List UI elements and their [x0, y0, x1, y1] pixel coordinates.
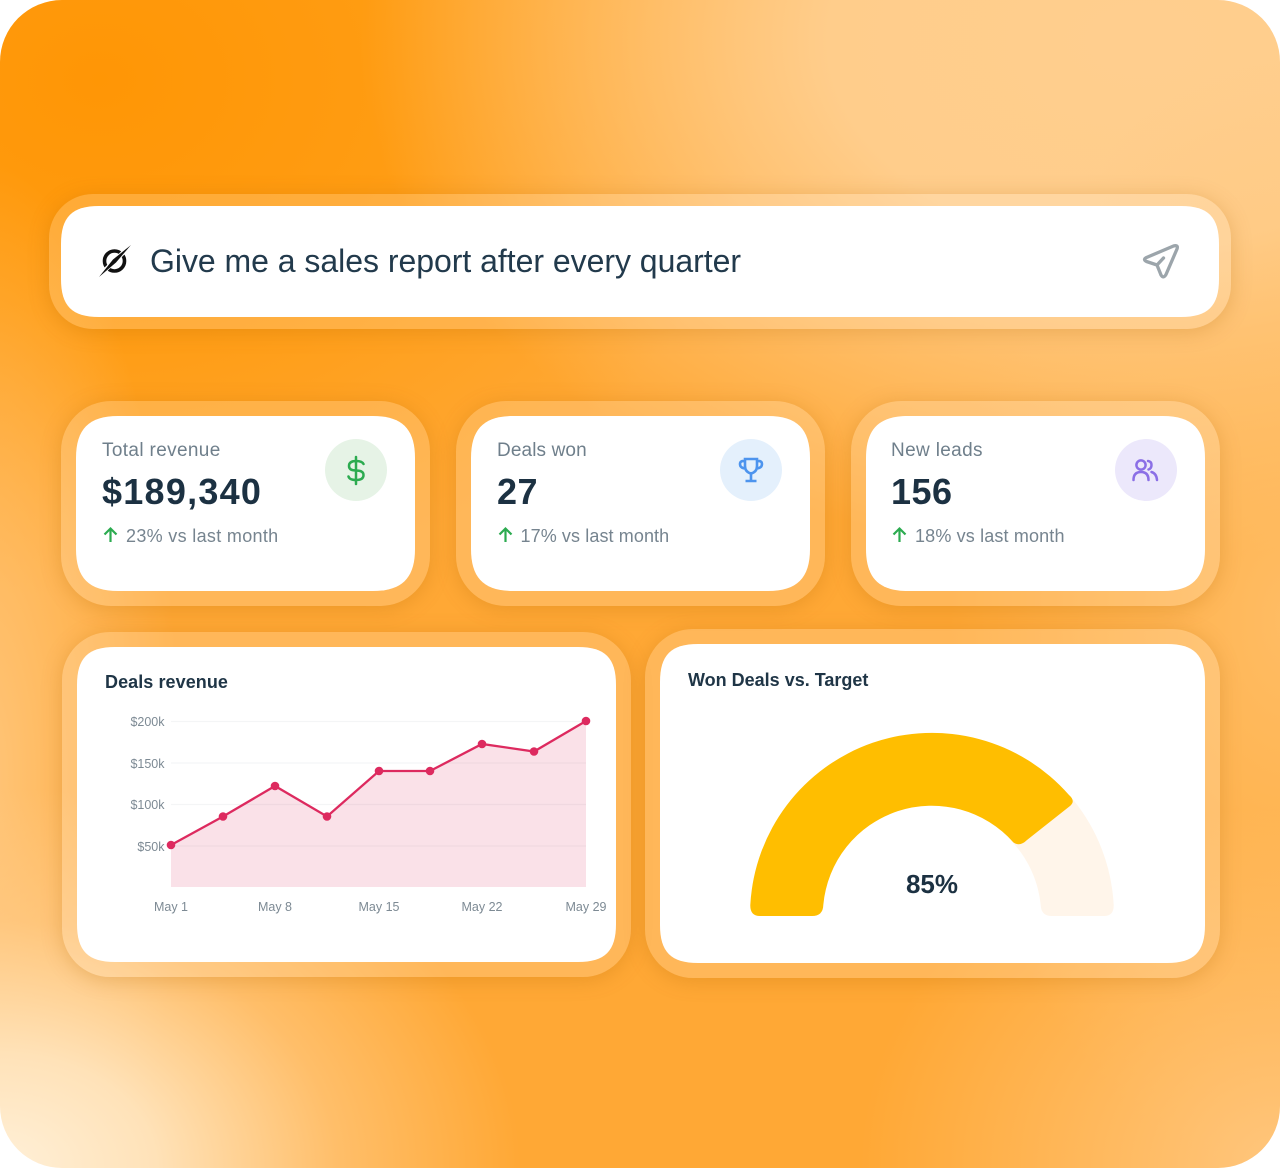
x axis labels: May 22 — [462, 900, 503, 914]
card body — [76, 416, 415, 591]
x axis labels: May 15 — [358, 900, 400, 914]
area fill — [171, 721, 586, 887]
label: Total revenue — [102, 440, 221, 461]
change: 17% vs last month — [520, 526, 669, 546]
y axis labels — [130, 715, 165, 854]
x axis labels: May 8 — [258, 900, 292, 914]
data line — [167, 717, 590, 849]
heading: Deals revenue — [105, 672, 228, 692]
value: 27 — [497, 471, 538, 512]
icon: trophy — [720, 439, 782, 501]
icon: logo — [99, 245, 131, 277]
card body — [866, 416, 1205, 591]
icon: up arrow — [892, 527, 906, 542]
prompt text: Give me a sales report after every quarter — [150, 243, 741, 279]
x axis labels: May 1 — [154, 900, 188, 914]
change: 18% vs last month — [915, 526, 1065, 546]
panel: deals won — [456, 401, 825, 606]
panel: total revenue — [61, 401, 430, 606]
y axis labels: $50k — [137, 840, 165, 854]
card body — [77, 647, 616, 962]
gauge value label: 85% — [906, 869, 958, 899]
y axis labels: $200k — [130, 715, 165, 729]
y axis labels: $150k — [130, 757, 165, 771]
icon: dollar — [325, 439, 387, 501]
panel: prompt bar — [49, 194, 1231, 329]
value: 156 — [891, 471, 953, 512]
prompt input card — [61, 206, 1219, 317]
value: $189,340 — [102, 471, 262, 512]
label: New leads — [891, 440, 983, 461]
card body — [471, 416, 810, 591]
panel: won deals vs target — [645, 629, 1220, 978]
gauge value arc — [750, 733, 1073, 916]
icon: people — [1115, 439, 1177, 501]
panel: new leads — [851, 401, 1220, 606]
gauge track — [1011, 800, 1114, 916]
y axis labels: $100k — [130, 798, 165, 812]
gauge chart — [750, 732, 1114, 916]
panel: deals revenue chart — [62, 632, 631, 977]
line chart — [130, 715, 607, 914]
heading: Won Deals vs. Target — [688, 670, 868, 690]
icon: send — [1142, 244, 1179, 278]
label: Deals won — [497, 440, 587, 461]
icon: up arrow — [498, 527, 512, 542]
x axis labels — [154, 900, 607, 914]
x axis labels: May 29 — [566, 900, 607, 914]
change: 23% vs last month — [126, 526, 279, 546]
icon: up arrow — [104, 527, 118, 542]
card body — [660, 644, 1205, 963]
